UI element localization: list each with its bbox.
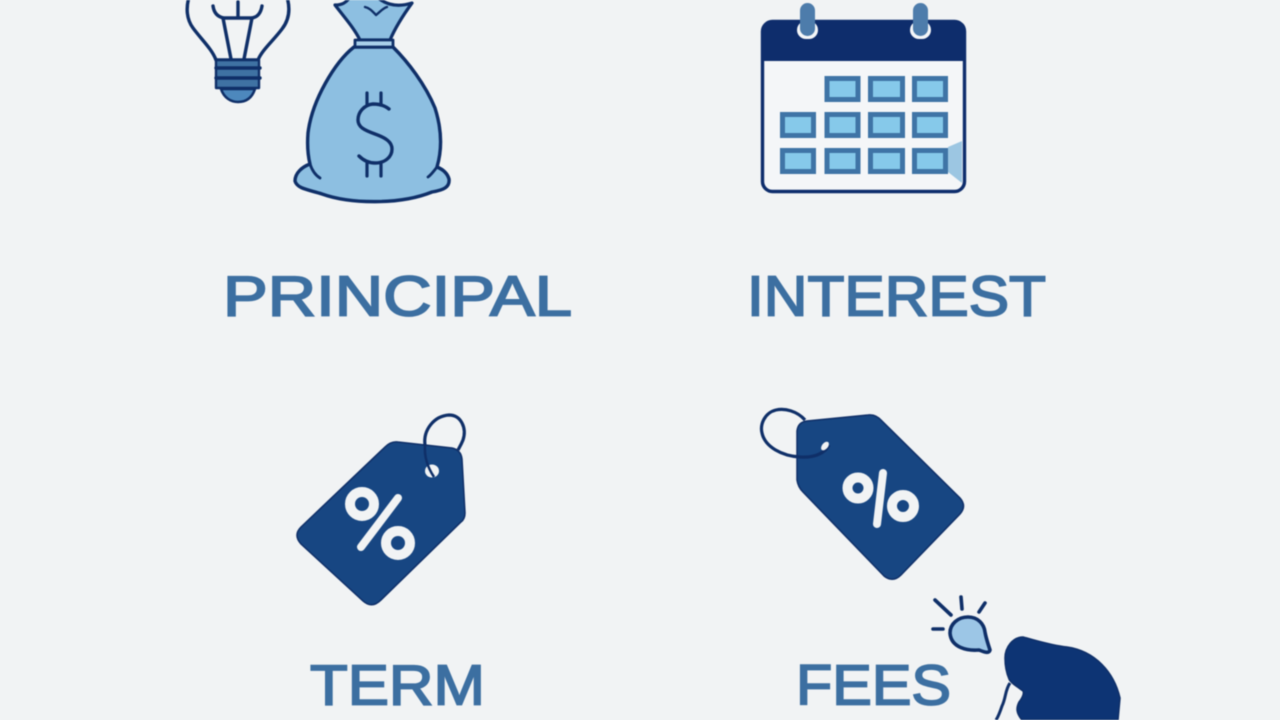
- icon: money bag: [295, 0, 449, 202]
- icon: light bulb: [187, 0, 289, 102]
- icon: dark blob figure: [996, 637, 1120, 720]
- heading: INTEREST: INTEREST: [747, 264, 1046, 328]
- icon: fees percent tag: [762, 409, 964, 579]
- calendar date cells: [782, 78, 946, 172]
- calendar rings: [797, 3, 931, 39]
- icon: small idea bulb with rays: [933, 597, 990, 652]
- heading: TERM: TERM: [310, 654, 485, 718]
- heading: PRINCIPAL: PRINCIPAL: [223, 264, 572, 328]
- dollar sign: [358, 104, 392, 163]
- icon: term percent tag: [297, 415, 465, 605]
- heading: FEES: FEES: [796, 654, 951, 718]
- icon: calendar: [762, 3, 966, 192]
